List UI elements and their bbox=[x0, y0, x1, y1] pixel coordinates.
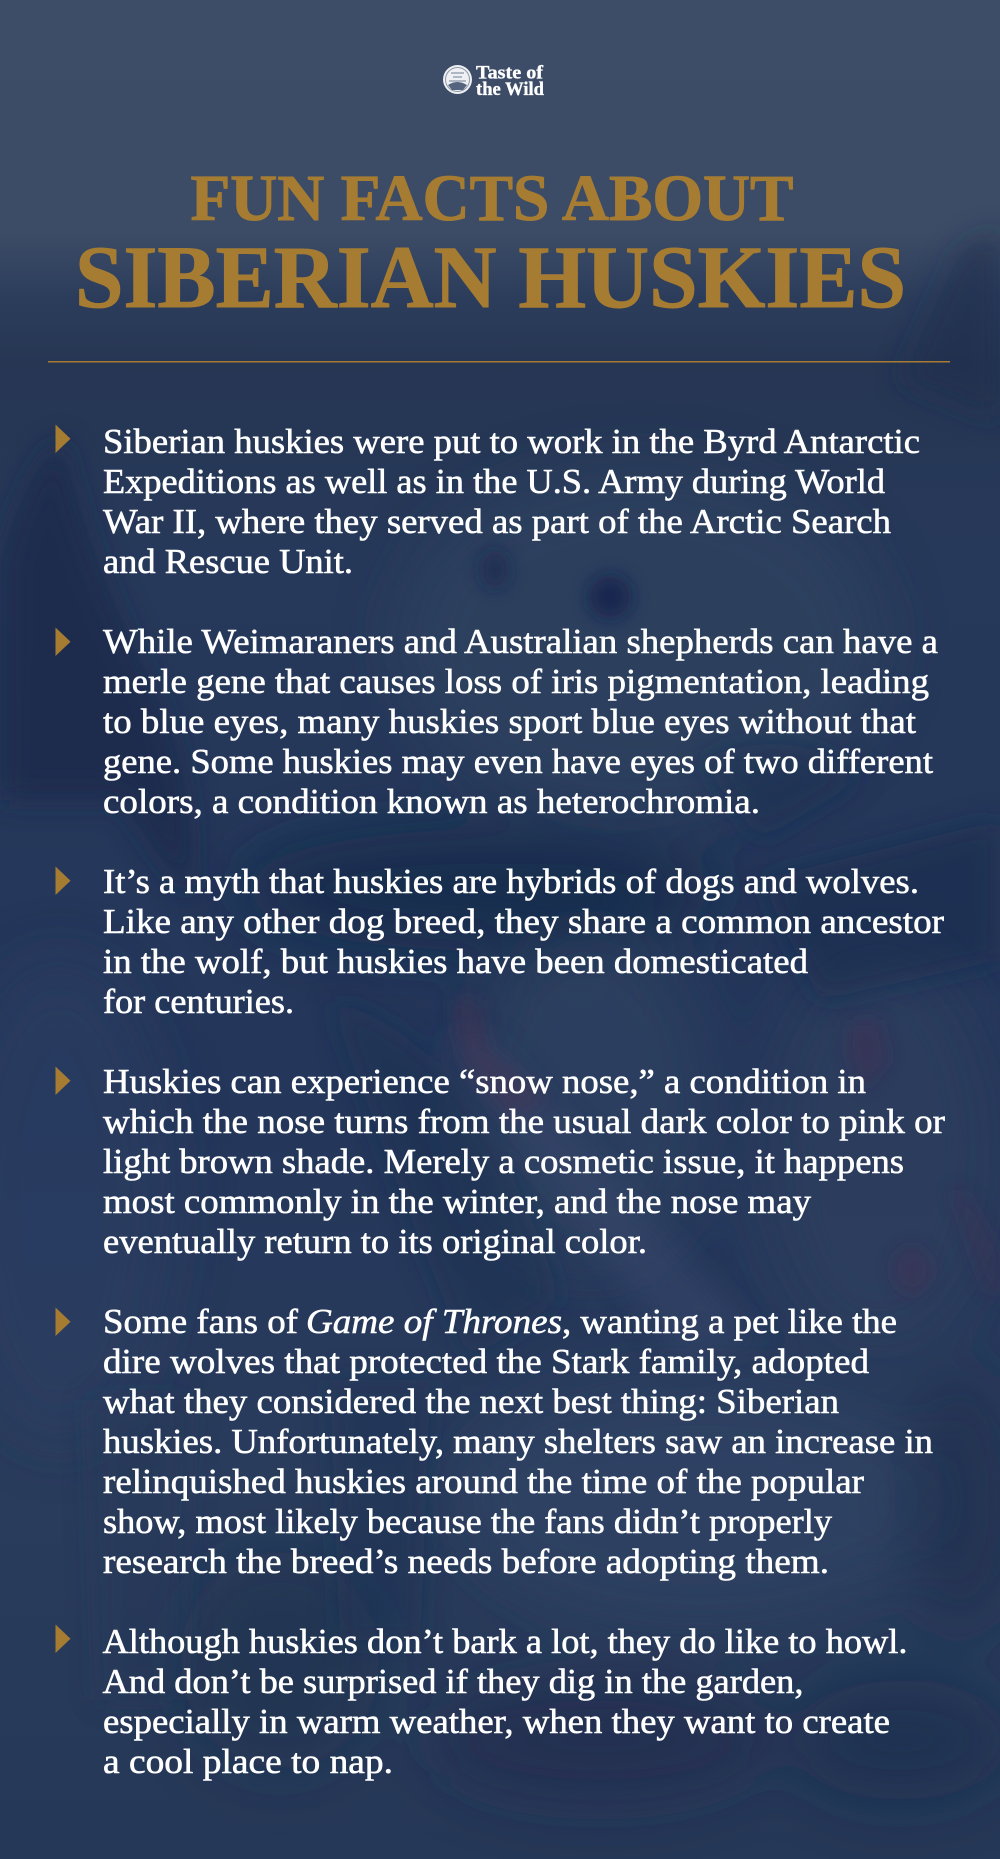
icon: gold arrow bullet bbox=[56, 1624, 70, 1653]
icon: round logo seal bbox=[443, 65, 472, 94]
title line 1: FUN FACTS ABOUT bbox=[190, 162, 794, 235]
fact 1: Byrd Antarctic Expeditions bbox=[56, 422, 920, 581]
fact 4 text: eventually return to its original color. bbox=[103, 1222, 647, 1261]
icon: gold arrow bullet bbox=[56, 1308, 70, 1336]
fact 2 text bbox=[103, 622, 938, 821]
fact 6: howling and digging bbox=[56, 1622, 908, 1781]
fact 2 text: merle gene that causes loss of iris pigmentation, leading bbox=[103, 662, 929, 701]
icon: gold arrow bullet bbox=[56, 866, 70, 895]
fact 6 text: Although huskies don’t bark a lot, they do like to howl. bbox=[102, 1622, 908, 1661]
fact 5 text: Game of Thrones bbox=[306, 1302, 562, 1341]
fact 1 text: and Rescue Unit. bbox=[103, 542, 353, 581]
header divider bbox=[48, 361, 950, 362]
logo wordmark bbox=[476, 62, 544, 100]
fact 5 text: research the breed’s needs before adopting them. bbox=[103, 1542, 829, 1581]
fact 3 text: Like any other dog breed, they share a common ancestor bbox=[103, 902, 944, 941]
fact 1 text bbox=[103, 422, 920, 581]
fact 3 text: for centuries. bbox=[103, 982, 294, 1021]
fact 1 text: Siberian huskies were put to work in the Byrd Antarctic bbox=[103, 422, 920, 461]
fact 2: blue eyes bbox=[56, 622, 938, 821]
icon: gold arrow bullet bbox=[56, 628, 70, 656]
logo wordmark: Taste of bbox=[476, 62, 544, 84]
fact 4 text: which the nose turns from the usual dark color to pink or bbox=[103, 1102, 945, 1141]
fact 2 text: colors, a condition known as heterochromia. bbox=[103, 782, 760, 821]
icon: gold arrow bullet bbox=[56, 1066, 70, 1095]
fact 6 text: especially in warm weather, when they want to create bbox=[103, 1702, 890, 1741]
fact 2 text: to blue eyes, many huskies sport blue eyes without that bbox=[103, 702, 916, 741]
fact 3 text: in the wolf, but huskies have been domesticated bbox=[103, 942, 809, 981]
logo: Taste of the Wild bbox=[443, 62, 544, 100]
title line 2: SIBERIAN HUSKIES bbox=[75, 229, 906, 327]
fact 6 text: And don’t be surprised if they dig in the garden, bbox=[102, 1662, 804, 1701]
fact 4 text: most commonly in the winter, and the nose may bbox=[103, 1182, 812, 1221]
fact 5 text bbox=[103, 1302, 933, 1581]
fact 3 text: It’s a myth that huskies are hybrids of dogs and wolves. bbox=[103, 862, 919, 901]
fact 4 text: light brown shade. Merely a cosmetic issue, it happens bbox=[103, 1142, 904, 1181]
fact 1 text: Expeditions as well as in the U.S. Army during World bbox=[103, 462, 886, 501]
fact 5 text: huskies. Unfortunately, many shelters saw an increase in bbox=[103, 1422, 933, 1461]
fact 3 text bbox=[103, 862, 944, 1021]
fact 4: snow nose bbox=[56, 1062, 945, 1261]
logo wordmark: the Wild bbox=[476, 79, 544, 100]
fact 5 text: relinquished huskies around the time of the popular bbox=[103, 1462, 864, 1501]
fact 6 text bbox=[102, 1622, 908, 1781]
fact 5 text: , wanting a pet like the bbox=[562, 1302, 897, 1341]
fact 5 text: Some fans of bbox=[103, 1302, 298, 1341]
fact 6 text: a cool place to nap. bbox=[103, 1742, 393, 1781]
fact 1 text: War II, where they served as part of the Arctic Search bbox=[103, 502, 892, 541]
fact 5 text: what they considered the next best thing: Siberian bbox=[103, 1382, 839, 1421]
title bbox=[75, 162, 906, 327]
fact 5 text: show, most likely because the fans didn’t properly bbox=[103, 1502, 833, 1541]
fact 5: Game of Thrones bbox=[56, 1302, 933, 1581]
fact 3: wolf myth bbox=[56, 862, 944, 1021]
fact 4 text bbox=[103, 1062, 945, 1261]
fact 4 text: Huskies can experience “snow nose,” a condition in bbox=[103, 1062, 866, 1101]
fact 5 text: dire wolves that protected the Stark family, adopted bbox=[103, 1342, 870, 1381]
fact 2 text: While Weimaraners and Australian shepherds can have a bbox=[103, 622, 938, 661]
fact 2 text: gene. Some huskies may even have eyes of two different bbox=[103, 742, 933, 781]
icon: gold arrow bullet bbox=[56, 424, 70, 453]
